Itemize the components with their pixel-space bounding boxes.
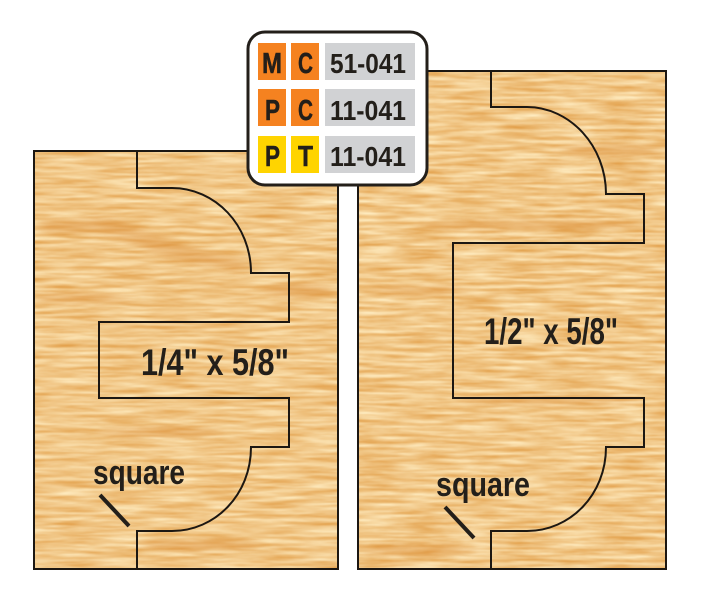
key row 3: 11-041 — [330, 141, 406, 172]
key row 2: C — [298, 95, 313, 127]
square pointer right — [445, 507, 474, 538]
key row 2: 11-041 — [330, 95, 406, 126]
panel: right wood piece, 1/2 x 5/8 — [358, 71, 666, 569]
key row 1: M — [262, 48, 282, 80]
square pointer left — [100, 495, 129, 526]
key row 2 — [258, 89, 415, 127]
panel: part number key — [248, 32, 427, 185]
dimension label right: 1/2" x 5/8" — [484, 311, 618, 352]
key row 3: T — [298, 141, 313, 173]
wood grain texture left — [34, 151, 338, 569]
panel outline right — [358, 71, 666, 569]
wood grain texture right — [358, 71, 666, 569]
panel outline left — [34, 151, 338, 569]
key row 3: P — [265, 141, 280, 173]
infographic: two joinery profiles with part number key — [33, 30, 667, 570]
darker grain bands right — [360, 144, 660, 555]
key row 2: P — [265, 95, 280, 127]
key row 3 — [258, 136, 415, 173]
key row 1 — [258, 43, 415, 80]
key row 1: 51-041 — [330, 48, 406, 79]
square label left: square — [93, 454, 185, 492]
darker grain bands left — [30, 218, 335, 550]
panel: left wood piece, 1/4 x 5/8 — [30, 151, 338, 569]
dimension label left: 1/4" x 5/8" — [141, 342, 289, 383]
key background — [248, 32, 427, 185]
key row 1: C — [298, 48, 313, 80]
joint profile line left — [99, 151, 289, 569]
square label right: square — [436, 466, 530, 504]
joint profile line right — [453, 71, 644, 569]
